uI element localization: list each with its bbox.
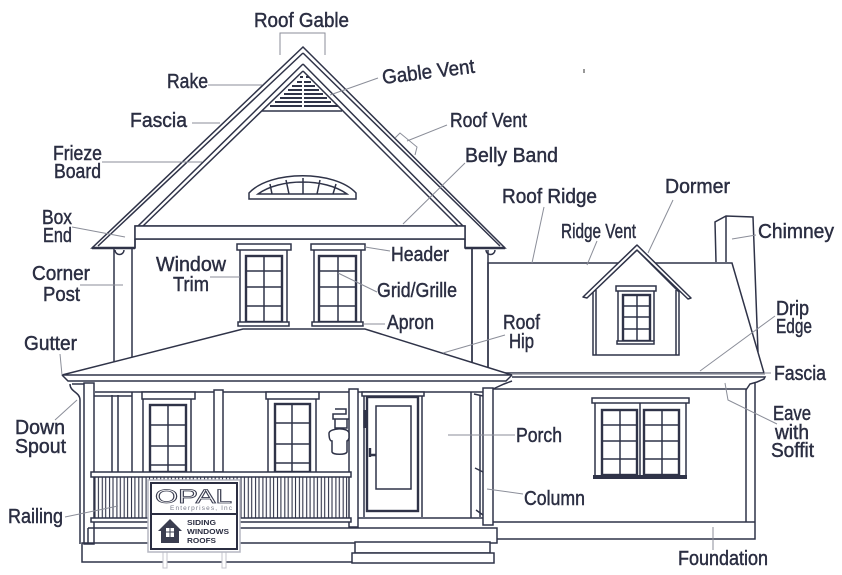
porch deck and foundation — [82, 527, 497, 562]
right wing roof — [488, 263, 765, 390]
label: Drip Edge — [700, 298, 812, 371]
label: Grid/Grille — [338, 273, 457, 302]
porch railing — [91, 472, 351, 522]
label: Fascia left: Fascia — [130, 110, 188, 132]
label: Apron: Apron — [387, 312, 434, 334]
sign logo text: OPAL — [155, 487, 232, 508]
label: Roof Vent: Roof Vent — [450, 110, 527, 132]
main gable roof — [92, 47, 505, 254]
sign services: ROOFS — [187, 538, 216, 545]
belly band — [135, 226, 465, 239]
house drawing — [62, 47, 765, 568]
stray mark — [583, 69, 585, 73]
label: Apron — [363, 312, 434, 334]
label: Box End: End — [43, 225, 72, 247]
hanging lantern — [329, 409, 349, 454]
label: Chimney: Chimney — [758, 221, 834, 243]
label: Corner Post — [32, 263, 123, 306]
label: Eave with Soffit: Soffit — [771, 440, 814, 462]
label: Roof Hip: Hip — [509, 331, 534, 353]
dormer — [583, 245, 691, 355]
gutter ends — [115, 250, 495, 254]
label: Eave with Soffit: with — [774, 422, 809, 444]
label: Dormer — [648, 176, 730, 253]
label: Porch: Porch — [516, 425, 562, 447]
porch left window — [142, 392, 195, 472]
label: Railing: Railing — [8, 506, 63, 528]
label: Down Spout: Spout — [15, 436, 66, 458]
label: Box End — [42, 207, 125, 247]
label: Corner Post: Corner — [32, 263, 90, 285]
fan window — [249, 176, 356, 199]
company sign — [148, 480, 240, 568]
downspout — [70, 384, 84, 544]
label: Ridge Vent — [561, 221, 636, 265]
label: Grid/Grille: Grid/Grille — [377, 280, 457, 302]
label: Belly Band — [403, 145, 558, 224]
label: Window Trim: Window — [156, 254, 227, 276]
right wing wall and foundation — [493, 383, 755, 539]
label: Eave with Soffit — [725, 383, 814, 462]
company sign: Enterprises, Inc — [170, 505, 233, 512]
dormer window — [616, 286, 656, 344]
label: Frieze Board: Board — [54, 161, 101, 183]
porch middle window — [266, 392, 319, 472]
label: Drip Edge: Edge — [776, 316, 812, 338]
label: Rake — [167, 71, 262, 93]
door — [358, 392, 483, 518]
main upper wall — [132, 239, 472, 366]
label: Roof Ridge — [502, 186, 597, 263]
label: Down Spout: Down — [15, 417, 65, 439]
label: Frieze Board: Frieze — [53, 143, 102, 165]
right wing window — [592, 398, 689, 479]
sign services: WINDOWS — [187, 529, 229, 536]
label: Railing — [8, 506, 118, 528]
front steps — [352, 542, 494, 563]
label: Window Trim — [156, 254, 240, 296]
porch roof — [62, 329, 512, 392]
label: Roof Hip: Roof — [503, 312, 540, 334]
label: Roof Ridge: Roof Ridge — [502, 186, 597, 208]
label: Window Trim: Trim — [173, 274, 209, 296]
label: Belly Band: Belly Band — [465, 145, 558, 167]
porch walls and posts — [84, 383, 493, 544]
label: Roof Vent — [407, 110, 527, 141]
label: Header — [365, 244, 449, 266]
label: Column: Column — [524, 488, 585, 510]
label: Roof Hip — [443, 312, 540, 353]
sign house icon — [158, 519, 182, 543]
label: Down Spout — [15, 400, 77, 458]
label: Corner Post: Post — [43, 284, 80, 306]
label: Gable Vent: Gable Vent — [381, 56, 476, 89]
sign services: SIDING — [187, 520, 217, 527]
label: Column — [487, 488, 585, 510]
sign services — [187, 520, 229, 545]
label: Fascia left — [130, 110, 220, 132]
label: Header: Header — [391, 244, 449, 266]
upper right window — [311, 244, 365, 326]
roof vent — [395, 133, 417, 155]
label: Roof Gable — [254, 10, 349, 55]
label: Rake: Rake — [167, 71, 208, 93]
label: Foundation — [678, 527, 768, 570]
label: Fascia right: Fascia — [774, 363, 827, 385]
label: Porch — [448, 425, 562, 447]
label: Eave with Soffit: Eave — [773, 403, 811, 425]
label: Box End: Box — [42, 207, 72, 229]
gable vent — [270, 77, 338, 106]
label: Foundation: Foundation — [678, 548, 768, 570]
label: Drip Edge: Drip — [776, 298, 809, 320]
label: Ridge Vent: Ridge Vent — [561, 221, 636, 243]
upper left window — [237, 244, 291, 326]
label: Roof Gable: Roof Gable — [254, 10, 349, 32]
label: Gutter: Gutter — [24, 333, 77, 355]
label: Gutter — [24, 333, 77, 375]
label: Dormer: Dormer — [665, 176, 730, 198]
chimney — [715, 216, 758, 352]
label: Gable Vent — [330, 56, 476, 95]
label: Frieze Board — [53, 143, 202, 183]
